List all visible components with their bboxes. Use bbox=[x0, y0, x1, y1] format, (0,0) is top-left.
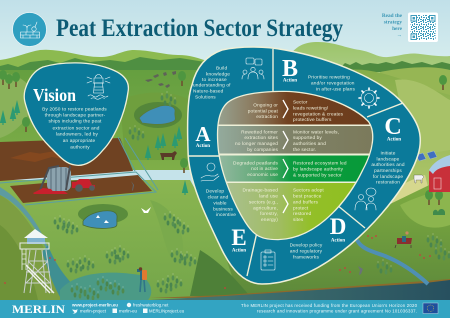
action D text: Develop policy bbox=[290, 243, 323, 249]
footer bar bbox=[0, 300, 450, 318]
action C text: partnerships bbox=[374, 168, 402, 174]
trees bbox=[0, 70, 447, 205]
row 4 text: Drainage-based bbox=[243, 187, 278, 193]
action B text: Prioritise rewetting bbox=[308, 75, 350, 81]
peat harvesting tractor bbox=[33, 166, 95, 194]
action C: Action bbox=[387, 138, 401, 142]
action E text: viable bbox=[213, 201, 227, 207]
solar panels bbox=[416, 151, 437, 161]
icon: people with speech bubbles bbox=[242, 58, 264, 79]
action A text: Build bbox=[216, 66, 227, 72]
hiker with binoculars bbox=[137, 267, 147, 292]
read the strategy link bbox=[382, 13, 403, 38]
action C text: Initiate bbox=[380, 150, 396, 156]
action E: E bbox=[231, 225, 247, 250]
vision text: ships including the peat bbox=[48, 119, 102, 125]
social icons bbox=[72, 303, 148, 314]
action A: Action bbox=[196, 144, 210, 149]
row 4 text: energy) bbox=[261, 217, 278, 223]
action E text bbox=[206, 189, 236, 218]
action E text: business bbox=[213, 207, 233, 213]
row 3 text: not in active bbox=[251, 166, 278, 172]
heron in wetland bbox=[358, 266, 363, 275]
row 2 text: the sector. bbox=[293, 147, 316, 153]
row 1 text: Sector bbox=[293, 99, 308, 105]
row 2 text: supported by bbox=[293, 135, 322, 141]
read the strategy link: strategy bbox=[384, 20, 402, 26]
row 4 text: sites bbox=[293, 217, 304, 223]
action E text: incentive bbox=[216, 212, 236, 218]
chevrons bbox=[283, 100, 288, 213]
action D text: frameworks bbox=[293, 255, 319, 261]
vision text: extraction sector and bbox=[52, 125, 100, 131]
MERLIN logo: MERLIN bbox=[12, 302, 65, 316]
bird bbox=[141, 207, 151, 213]
project links: www.project-merlin.eu bbox=[71, 302, 118, 307]
outer teal shape bbox=[188, 47, 420, 284]
row 2 text: Rewetted former bbox=[241, 129, 278, 135]
vision text: landowners, led by bbox=[56, 132, 99, 138]
read the strategy link: Read the bbox=[382, 13, 403, 19]
icon: clipboard bbox=[261, 250, 275, 270]
row 2 text: authorities and bbox=[293, 141, 326, 147]
action E text: clear and bbox=[208, 195, 229, 201]
lake: upper bbox=[134, 102, 182, 128]
row 4 text: sectors (e.g., bbox=[249, 199, 278, 205]
action D text bbox=[290, 243, 323, 261]
action B text: and/or revegetation bbox=[311, 81, 355, 87]
row 3 text: by landscape authority bbox=[293, 166, 344, 172]
EU flag bbox=[423, 303, 438, 314]
row 1 text bbox=[248, 99, 344, 123]
action A text: understanding of bbox=[193, 82, 231, 88]
cow: brown bbox=[160, 151, 177, 160]
funding statement: research and innovation programme under grant agreement No 101036337. bbox=[257, 309, 417, 314]
action A text: Nature-based bbox=[193, 88, 224, 94]
icon: hand with coin bbox=[201, 163, 219, 181]
row 4 text: best practice bbox=[293, 193, 322, 199]
row 3 text: Degraded peatlands bbox=[233, 160, 278, 166]
peat field: lower bbox=[10, 175, 152, 203]
flower clusters bbox=[4, 235, 431, 289]
action C text: authorities and bbox=[371, 162, 405, 168]
row 2 text: extraction sites bbox=[244, 135, 278, 141]
row 4 text: Sectors adopt bbox=[293, 187, 324, 193]
sky background bbox=[0, 0, 450, 70]
vision text bbox=[42, 106, 107, 151]
row 4 text: and buffers bbox=[293, 199, 319, 205]
action C text: for landscape bbox=[373, 174, 403, 180]
lake: lower with swans bbox=[78, 204, 128, 228]
action B text bbox=[308, 75, 355, 93]
central panel bbox=[210, 90, 380, 243]
project links: merlin-project bbox=[80, 308, 107, 314]
title: Peat Extraction Sector Strategy bbox=[56, 15, 343, 42]
peat field: upper bbox=[0, 138, 133, 181]
row 4 text bbox=[243, 187, 324, 223]
action A text bbox=[193, 66, 231, 100]
red barn bbox=[429, 155, 450, 192]
QR code bbox=[408, 12, 438, 42]
reeds bbox=[54, 91, 450, 300]
row 4 text: restored bbox=[293, 211, 312, 217]
action E: Action bbox=[232, 248, 246, 254]
row 4 text: protect bbox=[293, 205, 309, 211]
project links bbox=[71, 302, 185, 314]
action E text: Develop bbox=[206, 189, 224, 195]
observation tower bbox=[20, 229, 54, 293]
action D: Action bbox=[331, 238, 345, 244]
header icon bbox=[12, 12, 46, 46]
vision heading: Vision bbox=[33, 85, 76, 105]
action A text: to increase bbox=[202, 77, 227, 83]
funding statement: The MERLIN project has received funding from the European Union's Horizon 2020 bbox=[241, 303, 418, 308]
row 2 text: by companies bbox=[247, 147, 279, 153]
row 1 text: leads rewetting/ bbox=[293, 105, 329, 111]
cow: black and white bbox=[414, 175, 424, 183]
action C text bbox=[371, 150, 405, 186]
vision text: authority bbox=[70, 145, 90, 151]
action B text: in after-use plans bbox=[316, 87, 355, 93]
action A text: knowledge bbox=[206, 72, 230, 78]
row 1 text: Ongoing or bbox=[253, 103, 278, 109]
action B: Action bbox=[283, 78, 297, 84]
action A text: Solutions bbox=[195, 94, 216, 100]
action C text: restoration bbox=[376, 180, 400, 186]
funding statement bbox=[241, 303, 418, 314]
action B: B bbox=[282, 56, 298, 82]
icon: lighthouse bbox=[87, 74, 110, 99]
field mounds and canals bbox=[0, 137, 158, 205]
row 4 text: agriculture, bbox=[253, 205, 278, 211]
row 1 text: extraction bbox=[256, 114, 278, 120]
geese flock bbox=[145, 71, 176, 88]
action D: D bbox=[330, 214, 346, 239]
vision text: through landscape partner- bbox=[45, 112, 106, 118]
row 2 text bbox=[235, 129, 339, 153]
read the strategy link: here bbox=[392, 26, 403, 32]
icon: gear bbox=[359, 88, 379, 108]
read the strategy link: → bbox=[397, 32, 402, 38]
row 1 text: protective buffers bbox=[293, 117, 332, 123]
icon: partners talking bbox=[355, 188, 376, 210]
action A: A bbox=[195, 122, 211, 146]
strategy diagram bbox=[188, 47, 420, 284]
row 4 text: land use bbox=[259, 193, 278, 199]
vision panel bbox=[24, 63, 128, 165]
row 3 text: & supported by sector bbox=[293, 172, 342, 178]
vision text: By 2050 to restore peatlands bbox=[42, 106, 107, 112]
row 3 text: Restored ecosystem led bbox=[293, 161, 347, 167]
vision text: an appropriate bbox=[63, 138, 96, 144]
hedges bbox=[433, 209, 445, 215]
section dividers bbox=[188, 49, 403, 276]
row 4 text: forestry, bbox=[260, 211, 278, 217]
row 1 text: revegetation & creates bbox=[293, 111, 344, 117]
bench with people bbox=[395, 231, 412, 248]
project links: merlin-eu bbox=[119, 308, 138, 314]
action C text: landscape bbox=[377, 156, 400, 162]
action D text: and regulatory bbox=[290, 249, 323, 255]
row 3 text: economic use bbox=[247, 172, 278, 178]
row 3 text bbox=[233, 160, 347, 178]
project links: freshwaterblog.net bbox=[133, 302, 169, 307]
row 1 text: potential peat bbox=[248, 108, 279, 114]
action C: C bbox=[384, 114, 402, 140]
row 2 text: no longer managed bbox=[235, 141, 278, 147]
row 2 text: Monitor water levels, bbox=[293, 129, 339, 135]
heron bbox=[131, 181, 134, 191]
project links: MERLINproject.eu bbox=[149, 308, 185, 314]
